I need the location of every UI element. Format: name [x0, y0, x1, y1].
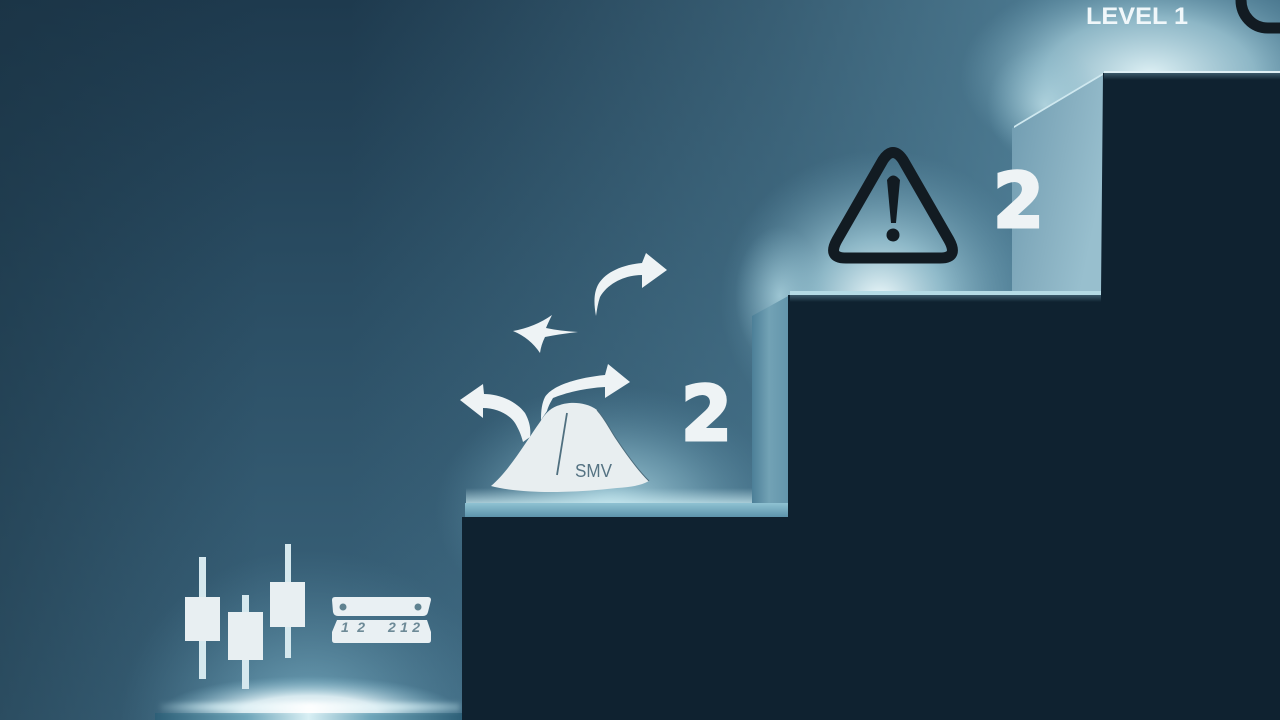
- highlight: second riser edge: [1014, 73, 1103, 128]
- glow: floor light: [120, 550, 462, 720]
- icon: price tag plate: [332, 597, 431, 643]
- mound label: SMV: [575, 461, 612, 481]
- plate characters: 1 2: [341, 619, 365, 635]
- number: second step 2: 2: [993, 156, 1044, 245]
- icon: warning triangle: [834, 152, 952, 258]
- icon: cropped rounded shape at top: [1241, 0, 1280, 28]
- icon: price tag plate: 212: [387, 619, 420, 635]
- glow: top step light: [960, 0, 1280, 180]
- step ledge: first: [465, 503, 788, 517]
- icon: SMV mound: [491, 403, 649, 492]
- step side wall: second riser: [1012, 75, 1103, 294]
- label: level 1: LEVEL 1: [1086, 3, 1188, 30]
- icon: arrow left star: [513, 315, 578, 353]
- glow: first step light: [435, 385, 785, 635]
- staircase silhouette: [462, 73, 1280, 720]
- staircase top edge: [1104, 71, 1280, 73]
- mound shaded edge: [597, 410, 649, 481]
- icon: arrow to the left over the mound: [460, 384, 530, 442]
- step ledge: second: [790, 291, 1102, 295]
- icon: arrow top right: [594, 253, 667, 316]
- step lip: top: [1104, 73, 1280, 80]
- icon: candlestick chart: [185, 544, 305, 689]
- icon: arrow to the right over the mound: [541, 364, 630, 420]
- step lip: second: [790, 295, 1101, 302]
- step side wall: first riser: [752, 295, 790, 505]
- glow: second step light: [720, 150, 1015, 450]
- number: first step 2: 2: [681, 369, 732, 458]
